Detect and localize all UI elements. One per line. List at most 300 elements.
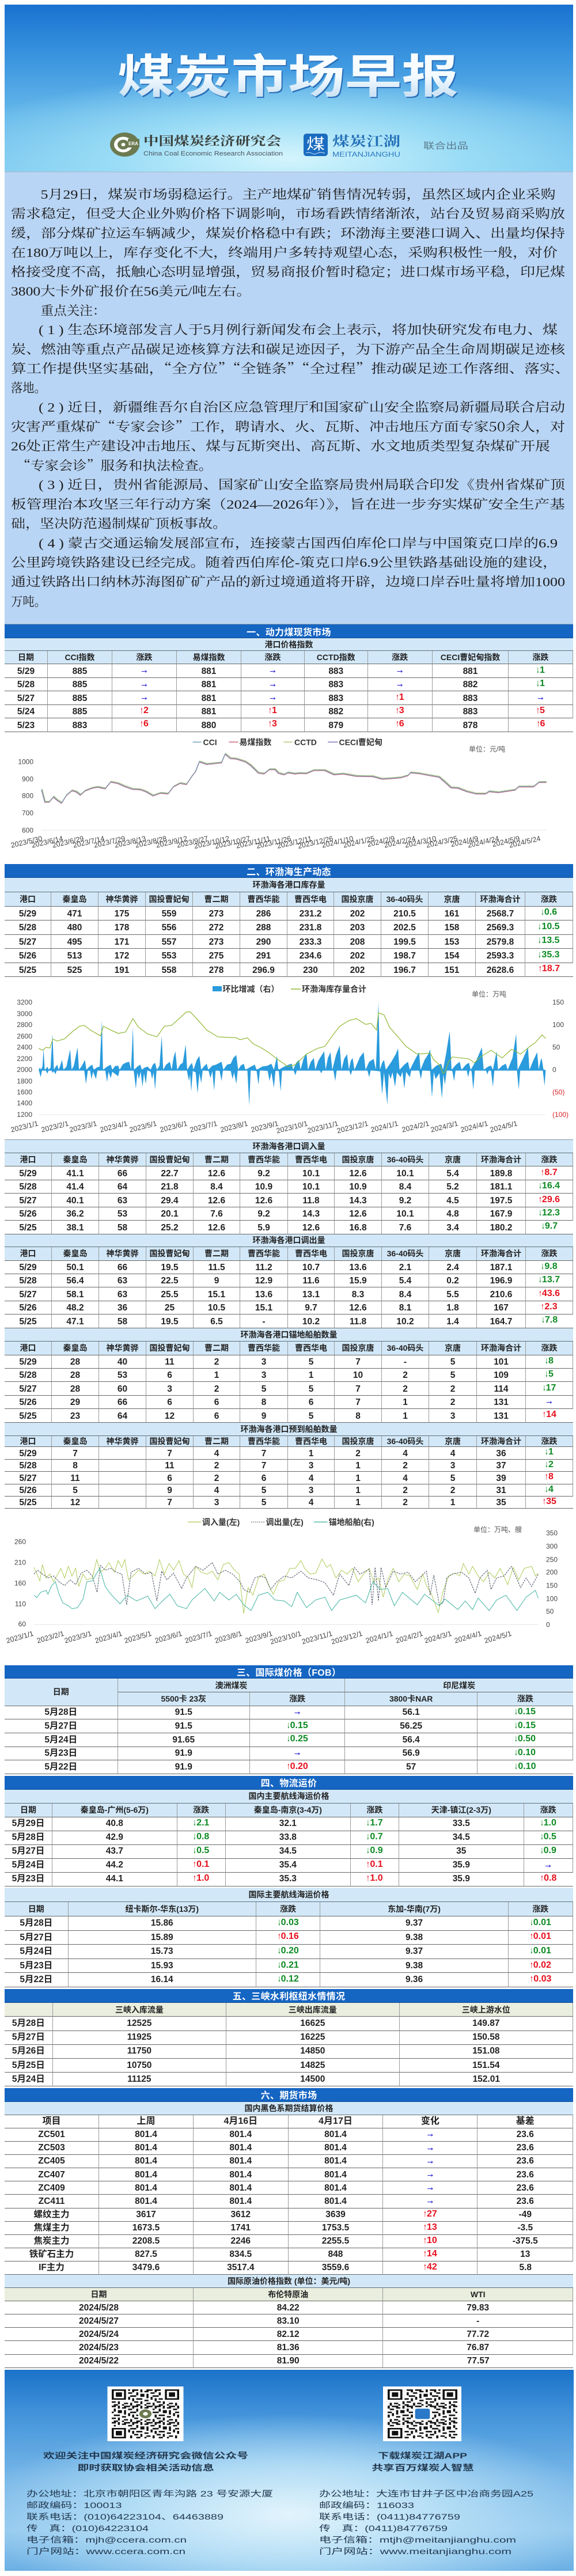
- table: FOB prices: 0.50: [518, 1734, 536, 1744]
- contact details: Dalian: 电子信箱：mtjh@meitanjianghu.com: [319, 2535, 516, 2544]
- table: port inflow: 41.1: [66, 1169, 84, 1179]
- table: port price index: ↑: [269, 719, 271, 729]
- table: ferrous futures settlement: 上周: [137, 2116, 156, 2126]
- legend: CECI曹妃甸: [339, 737, 382, 747]
- left y axis: 2400: [17, 1043, 32, 1051]
- table: anchored vessels: 101: [494, 1357, 509, 1367]
- x axis date labels: 2023/11/1: [306, 1119, 339, 1135]
- table: ferrous futures settlement: 23.6: [517, 2196, 534, 2206]
- table: expected vessels: 5/26: [19, 1486, 37, 1495]
- table: port outflow: 9: [214, 1276, 219, 1286]
- table: port inflow: ↑: [539, 1195, 541, 1204]
- table: ferrous futures settlement: ZC409: [38, 2183, 65, 2193]
- table: FOB prices: 56.25: [400, 1721, 422, 1731]
- item 2: [11, 400, 565, 474]
- table: domestic freight: ↑: [367, 1873, 370, 1883]
- legend: 调出量(左): [266, 1518, 304, 1527]
- table: port inventory: 36-40码头: [386, 895, 423, 904]
- table: port inflow: 3.4: [446, 1223, 459, 1233]
- table: port outflow: 36-40码头: [387, 1249, 423, 1258]
- table: port inflow: 53: [118, 1209, 127, 1219]
- table: port inventory: 158: [445, 923, 459, 933]
- table: port outflow: 10.7: [302, 1263, 320, 1272]
- table: port inflow: 9.2: [257, 1169, 270, 1179]
- table: ferrous futures settlement: 2255.5: [322, 2236, 349, 2246]
- x axis date labels: 2024/3/1: [430, 1119, 459, 1134]
- x axis date labels: 2024/5/9: [491, 834, 521, 848]
- item 4: 万吨。: [11, 594, 46, 609]
- table: ferrous futures settlement: [5, 2115, 573, 2275]
- table: port price index: 日期: [18, 653, 34, 662]
- x axis date labels: 2024/4/1: [453, 1630, 483, 1645]
- x axis date labels: 2023/6/14: [31, 834, 64, 849]
- table: expected vessels: [5, 1435, 573, 1509]
- table: port price index: ↓: [537, 665, 539, 675]
- table: port inflow: 秦皇岛: [63, 1155, 88, 1164]
- table: port price index: 878: [463, 721, 478, 730]
- summary paragraph: 格接受度不高，抵触心态明显增强，贸易商报价暂时稳定；进口煤市场平稳，印尼煤: [11, 265, 565, 280]
- table: expected vessels: 4: [309, 1498, 313, 1507]
- table: port price index: →: [536, 692, 545, 702]
- table: port inflow: 港口: [20, 1155, 36, 1164]
- table: ferrous futures settlement: 2208.5: [132, 2236, 160, 2246]
- table: Three Gorges flows: 151.08: [472, 2046, 499, 2056]
- table: ferrous futures settlement: 801.4: [324, 2130, 347, 2139]
- table: domestic freight: 1.0: [196, 1873, 209, 1883]
- line: total inventory: [39, 1012, 545, 1073]
- table: ferrous futures settlement: →: [426, 2129, 434, 2139]
- section heading: [5, 1989, 573, 2003]
- left y axis: 3200: [17, 998, 32, 1006]
- table: crude oil prices: 83.10: [277, 2316, 300, 2326]
- table: Three Gorges flows: 5月26日: [12, 2046, 45, 2056]
- table: ferrous futures settlement: 42: [427, 2262, 437, 2272]
- table: ferrous futures settlement: ↑: [424, 2262, 426, 2272]
- x axis date labels: 2023/7/29: [93, 834, 126, 849]
- table: international freight: ↓: [278, 1946, 281, 1956]
- table: port inflow: 9.2: [399, 1196, 411, 1206]
- table: port inventory: 203: [350, 923, 365, 933]
- table: anchored vessels: 曹西华电: [295, 1343, 327, 1353]
- table: port inflow: 66: [118, 1169, 127, 1179]
- table: expected vessels: 5: [73, 1486, 78, 1495]
- table: port inflow: 38.1: [66, 1223, 84, 1233]
- table: domestic freight: 0.9: [544, 1846, 556, 1855]
- table: ferrous futures settlement: 4月16日: [223, 2116, 257, 2126]
- table: port inflow: 8.4: [399, 1182, 411, 1192]
- table: port inflow: 5.9: [257, 1223, 270, 1233]
- table: domestic freight: 33.8: [279, 1832, 297, 1842]
- table: port outflow: [5, 1247, 573, 1328]
- table: port inflow: 曹西华电: [295, 1155, 327, 1164]
- table: domestic freight: 0.9: [370, 1846, 383, 1855]
- table: port price index: ↑: [537, 706, 539, 715]
- caption: app: 共享百万煤炭人智慧: [372, 2463, 473, 2472]
- table: international freight: 15.89: [151, 1933, 173, 1942]
- section heading: 六、期货市场: [261, 2091, 317, 2101]
- table: anchored vessels: 60: [118, 1384, 127, 1394]
- sub heading: domestic routes: [5, 1790, 573, 1804]
- table: anchored vessels: 6: [167, 1397, 172, 1407]
- x axis date labels: 2023/11/11: [235, 834, 271, 850]
- section heading: 二、环渤海生产动态: [247, 867, 331, 877]
- table: FOB prices: 5月24日: [44, 1735, 77, 1745]
- table: ferrous futures settlement: 3559.6: [322, 2263, 349, 2272]
- table: international freight: 5月22日: [20, 1975, 52, 1984]
- table: ferrous futures settlement: 项目: [42, 2116, 61, 2126]
- legend: CCI: [203, 737, 217, 747]
- table: anchored vessels: 国投曹妃甸: [150, 1343, 190, 1353]
- table: domestic freight: ↓: [540, 1832, 543, 1842]
- contact details: Beijing: 电子信箱：mjh@ccera.com.cn: [26, 2535, 187, 2544]
- table: anchored vessels: 曹二期: [204, 1343, 229, 1353]
- table: ferrous futures settlement: ZC411: [39, 2196, 65, 2206]
- table: domestic freight: 1.7: [370, 1818, 383, 1828]
- table: international freight: 0.16: [281, 1931, 299, 1941]
- table: expected vessels: 6: [262, 1473, 266, 1483]
- table: ferrous futures settlement: 801.4: [324, 2156, 347, 2166]
- table: domestic freight: ↓: [194, 1846, 196, 1855]
- table: anchored vessels: 3: [262, 1357, 266, 1367]
- table: expected vessels: 8: [548, 1472, 554, 1482]
- table: port inventory: 2569.3: [487, 923, 514, 933]
- table: domestic freight: 天津-镇江(2-3万): [431, 1805, 491, 1814]
- sub heading: anchored vessels: 环渤海各港口锚地船舶数量: [241, 1330, 338, 1339]
- table: port price index: →: [268, 665, 277, 675]
- table: port inventory: 230: [303, 965, 318, 975]
- table: domestic freight: 5月23日: [12, 1874, 44, 1884]
- table: port inventory: 480: [67, 923, 82, 933]
- table: expected vessels: 5/25: [19, 1498, 37, 1507]
- table: FOB prices: ↓: [515, 1748, 517, 1757]
- table: ferrous futures settlement: 848: [328, 2249, 343, 2259]
- table: port outflow: 8.4: [399, 1290, 411, 1300]
- table: ferrous futures settlement: 801.4: [324, 2143, 347, 2153]
- table: ferrous futures settlement: 801.4: [135, 2183, 157, 2193]
- table: FOB prices: ↓: [515, 1734, 517, 1744]
- x axis date labels: 2024/1/1: [365, 1630, 394, 1645]
- table: anchored vessels: 1: [214, 1370, 219, 1380]
- table: port inflow: 4.5: [446, 1196, 459, 1206]
- table: port inventory: 国投京唐: [341, 895, 373, 904]
- table: ferrous futures settlement: 焦炭主力: [33, 2236, 69, 2246]
- table: expected vessels: 曹二期: [204, 1437, 229, 1446]
- item 3: 板管理治本攻坚三年行动方案（2024—2026年）》，旨在进一步夯实煤矿安全生产基: [11, 497, 565, 512]
- contact details: Beijing: [26, 2489, 273, 2556]
- table: expected vessels: 9: [167, 1486, 172, 1495]
- section 4: logistics freight: [5, 1776, 573, 1987]
- table: ferrous futures settlement: 801.4: [229, 2143, 252, 2153]
- table: port outflow: 58: [118, 1317, 127, 1327]
- x axis date labels: 2024/2/1: [395, 1630, 424, 1645]
- table: port inflow: 58: [118, 1223, 127, 1233]
- table: port outflow: 5/28: [19, 1276, 37, 1286]
- table: port inflow: 29.4: [161, 1196, 179, 1206]
- table: port inventory: 神华黄骅: [106, 895, 138, 904]
- table: international freight: 0.03: [281, 1918, 299, 1927]
- table: port inventory: 0.6: [544, 907, 557, 917]
- table: port price index: ↑: [537, 719, 540, 729]
- table: port price index: 5: [540, 706, 545, 715]
- table: port inventory: [5, 892, 573, 977]
- right y axis: 150: [552, 998, 564, 1006]
- summary paragraph: [11, 187, 565, 298]
- table: expected vessels: 曹西华电: [295, 1437, 327, 1446]
- x axis date labels: 2023/2/1: [40, 1119, 70, 1134]
- table: anchored vessels: 6: [214, 1397, 219, 1407]
- table: domestic freight: 35: [456, 1846, 466, 1856]
- table: FOB prices: 5月28日: [44, 1707, 77, 1717]
- section heading: [5, 1776, 573, 1790]
- left y axis: 110: [15, 1600, 26, 1608]
- sub heading: port outflow: 环渤海各港口调出量: [252, 1236, 325, 1245]
- table: port inflow: 16.8: [349, 1223, 367, 1233]
- table: port outflow: 43.6: [542, 1289, 560, 1298]
- table: expected vessels: 37: [496, 1461, 506, 1471]
- table: port price index: 3: [272, 719, 277, 729]
- table: domestic freight: 2.1: [196, 1818, 209, 1828]
- table: port inventory: ↓: [539, 950, 541, 960]
- table: FOB prices: 印尼煤炭: [443, 1681, 475, 1690]
- table: port outflow: 涨跌: [541, 1249, 558, 1258]
- x axis date labels: 2023/10/27: [214, 834, 251, 850]
- x axis date labels: 2023/12/1: [331, 1630, 363, 1646]
- sub heading: port price index: [5, 638, 573, 651]
- table: port inflow: 22.7: [161, 1169, 179, 1179]
- table: ferrous futures settlement: 螺纹主力: [33, 2210, 69, 2219]
- table: expected vessels: 7: [167, 1449, 172, 1459]
- right y axis: 100: [552, 1021, 564, 1029]
- table: port outflow: 48.2: [66, 1303, 84, 1313]
- x axis date labels: 2023/7/14: [72, 834, 105, 849]
- table: port outflow: 1.4: [446, 1317, 459, 1327]
- table: port outflow: 13.1: [302, 1290, 320, 1300]
- table: anchored vessels: 10: [353, 1370, 363, 1380]
- table: Three Gorges flows: [5, 2003, 573, 2086]
- table: ferrous futures settlement: 13: [520, 2249, 530, 2259]
- table: port inventory: 233.3: [300, 937, 321, 947]
- logo: Meitan Jianghu: 煤: [306, 132, 325, 154]
- table: domestic freight: 35.4: [279, 1860, 297, 1870]
- table: anchored vessels: 6: [214, 1411, 219, 1421]
- table: anchored vessels: 29: [70, 1397, 80, 1407]
- table: ferrous futures settlement: ZC501: [38, 2130, 65, 2139]
- table: ferrous futures settlement: 801.4: [135, 2196, 157, 2206]
- x axis date labels: 2024/2/9: [366, 834, 396, 848]
- caption: WeChat account: 欢迎关注中国煤炭经济研究会微信公众号: [43, 2451, 248, 2460]
- table: expected vessels: 6: [167, 1473, 172, 1483]
- table: port inflow: 189.8: [490, 1169, 512, 1179]
- table: Three Gorges flows: 14825: [300, 2060, 325, 2070]
- table: port outflow: 13.6: [349, 1263, 367, 1272]
- table: international freight: 5月27日: [20, 1933, 52, 1942]
- table: anchored vessels: 5/29: [19, 1357, 37, 1367]
- table: domestic freight: 35.3: [279, 1874, 297, 1884]
- table: ferrous futures settlement: ↑: [424, 2236, 426, 2245]
- x axis date labels: 2023/2/1: [36, 1630, 65, 1645]
- table: port outflow: 1.8: [446, 1303, 459, 1313]
- table: anchored vessels: 2: [450, 1397, 455, 1407]
- item 2: 26处正常生产建设冲击地压、煤与瓦斯突出、高瓦斯、水文地质类型复杂煤矿开展: [11, 439, 550, 453]
- left y axis: 2000: [17, 1066, 32, 1074]
- table: port inflow: 25.2: [161, 1223, 179, 1233]
- table: port inflow: [5, 1153, 573, 1234]
- table: crude oil prices: 81.90: [277, 2356, 300, 2366]
- table: international freight: 0.01: [533, 1918, 551, 1927]
- left y axis: 1400: [17, 1099, 32, 1107]
- table: anchored vessels: 23: [70, 1411, 80, 1421]
- table: ferrous futures settlement: 827.5: [135, 2249, 157, 2259]
- table: port price index: 1: [540, 679, 545, 688]
- table: domestic freight: 42.9: [106, 1832, 123, 1842]
- table: port inflow: 12.6: [349, 1209, 367, 1219]
- table: crude oil prices: 日期: [91, 2290, 107, 2299]
- table: port inflow: 10.1: [396, 1209, 414, 1219]
- section 2: Bohai Rim production dynamics: [5, 864, 573, 1646]
- table: port inventory: 202: [350, 909, 365, 918]
- section 6: futures market: [5, 2088, 573, 2368]
- table: crude oil prices: [5, 2288, 573, 2368]
- legend: 环渤海库存量合计: [302, 984, 366, 994]
- table: ferrous futures settlement: 3612: [231, 2210, 251, 2219]
- summary paragraph: 在180万吨以上，库存变化不大，终端用户多转持观望心态，采购积极性一般，对价: [11, 245, 558, 260]
- table: expected vessels: 11: [70, 1473, 80, 1483]
- table: port inventory: ↓: [541, 907, 544, 917]
- right y axis: 300: [546, 1543, 558, 1551]
- table: crude oil prices: -: [476, 2316, 479, 2326]
- table: port inventory: 171: [115, 937, 129, 947]
- table: port inventory: ↑: [539, 964, 541, 973]
- table: port inflow: 涨跌: [541, 1155, 558, 1164]
- table: expected vessels: 2: [450, 1486, 455, 1495]
- table: port outflow: 15.1: [255, 1303, 272, 1313]
- table: anchored vessels: 5: [262, 1384, 266, 1394]
- table: anchored vessels: 114: [494, 1384, 508, 1394]
- section heading: [5, 2088, 573, 2102]
- table: port inflow: 64: [118, 1182, 127, 1192]
- table: Three Gorges flows: 11125: [127, 2074, 151, 2084]
- table: expected vessels: 2: [403, 1498, 408, 1507]
- table: port outflow: 10.2: [302, 1317, 320, 1327]
- table: ferrous futures settlement: 1673.5: [132, 2223, 160, 2233]
- caption: WeChat account: 即时获取协会相关活动信息: [78, 2463, 214, 2472]
- table: anchored vessels: 14: [546, 1410, 556, 1419]
- table: port outflow: 曹二期: [204, 1249, 229, 1258]
- table: domestic freight: [5, 1804, 573, 1886]
- table: port inflow: 14.3: [349, 1196, 367, 1206]
- table: anchored vessels: [5, 1342, 573, 1423]
- right y axis: 50: [546, 1608, 554, 1616]
- table: domestic freight: 秦皇岛-南京(3-4万): [254, 1805, 322, 1814]
- table: port inventory: 5/27: [19, 937, 36, 947]
- table: port outflow: 63: [118, 1276, 127, 1286]
- table: port inflow: 神华黄骅: [106, 1155, 138, 1164]
- table: port outflow: ↓: [541, 1262, 544, 1271]
- table: port price index: 885: [73, 694, 87, 703]
- legend: [188, 1518, 374, 1527]
- x axis date labels: 2023/6/1: [154, 1630, 183, 1645]
- table: ferrous futures settlement: →: [426, 2143, 434, 2152]
- table: FOB prices: 5月27日: [44, 1721, 77, 1731]
- right y axis: 0: [552, 1066, 556, 1074]
- item 1: ( 1 ) 生态环境部发言人于5月例行新闻发布会上表示，将加快研究发布电力、煤: [39, 323, 558, 338]
- table: Three Gorges flows: 150.58: [472, 2032, 499, 2042]
- table: FOB prices: 91.9: [175, 1748, 192, 1758]
- table: port inflow: 10.9: [349, 1182, 367, 1192]
- table: port inventory: 5/26: [19, 951, 36, 961]
- table: domestic freight: 0.7: [370, 1832, 383, 1842]
- QR code: WeChat official account: [107, 2386, 183, 2441]
- table: international freight: 15.93: [151, 1961, 173, 1971]
- table: anchored vessels: 40: [118, 1357, 127, 1367]
- table: expected vessels: 7: [167, 1498, 172, 1507]
- table: port inflow: 20.1: [161, 1209, 179, 1219]
- table: port inventory: 288: [256, 923, 271, 933]
- table: port inventory: 290: [256, 937, 271, 947]
- table: international freight: ↑: [278, 1931, 281, 1941]
- table: port outflow: 11.6: [302, 1276, 320, 1286]
- table: expected vessels: 秦皇岛: [63, 1437, 88, 1446]
- x axis date labels: 2024/2/24: [383, 834, 416, 849]
- table: international freight: 9.37: [406, 1946, 423, 1956]
- table: domestic freight: 0.8: [196, 1832, 209, 1842]
- table: anchored vessels: 28: [70, 1357, 80, 1367]
- table: anchored vessels: 2: [403, 1384, 408, 1394]
- table: port price index: 885: [73, 680, 87, 690]
- table: ferrous futures settlement: IF主力: [39, 2263, 65, 2272]
- sub heading: expected vessels: 环渤海各港口预到船舶数量: [241, 1424, 338, 1433]
- table: port price index: 5/27: [17, 694, 35, 703]
- sub heading: ferrous futures: 国内黑色系期货结算价格: [244, 2104, 333, 2113]
- table: Three Gorges flows: 16625: [300, 2018, 325, 2028]
- table: domestic freight: 5月28日: [12, 1832, 44, 1842]
- table: port outflow: 国投京唐: [342, 1249, 374, 1258]
- item 3: [11, 478, 566, 532]
- right y axis: 350: [546, 1529, 558, 1537]
- bars: week-on-week change: [39, 1002, 545, 1105]
- table: anchored vessels: 5/27: [19, 1384, 37, 1394]
- table: FOB prices: 91.5: [175, 1721, 192, 1731]
- table: international freight: 0.03: [533, 1974, 551, 1984]
- table: FOB prices: 0.15: [518, 1721, 536, 1730]
- table: port price index: ↑: [396, 692, 399, 702]
- table: port price index: 880: [202, 721, 216, 730]
- y axis labels: [18, 757, 33, 834]
- table: port inflow: 7.6: [399, 1223, 411, 1233]
- table: port outflow: 国投曹妃甸: [150, 1249, 190, 1258]
- table: domestic freight: 0.1: [370, 1859, 383, 1869]
- table: crude oil prices: 2024/5/24: [79, 2329, 119, 2339]
- section heading: [5, 1665, 573, 1679]
- table: ferrous futures settlement: 801.4: [135, 2169, 157, 2180]
- table: anchored vessels: 28: [70, 1384, 80, 1394]
- table: port price index: ↑: [141, 706, 143, 715]
- section 5: Three Gorges water conditions: [5, 1989, 573, 2086]
- table: anchored vessels: 3: [450, 1411, 455, 1421]
- contact details: Beijing: 传 真：(010)64223104: [26, 2524, 149, 2533]
- x axis date labels: 2023/12/1: [336, 1119, 369, 1135]
- logo: China Coal Economic Research Association: China Coal Economic Research Association: [143, 150, 283, 157]
- table: port inventory: 京唐: [444, 895, 460, 904]
- table: port inventory: 296.9: [252, 965, 275, 975]
- table: port outflow: 25.5: [161, 1290, 179, 1300]
- table: domestic freight: 32.1: [279, 1819, 297, 1828]
- table: port price index: CCI指数: [65, 653, 95, 662]
- x axis date labels: 2023/8/1: [219, 1119, 249, 1134]
- table: domestic freight: ↑: [541, 1873, 543, 1883]
- table: crude oil prices: 2024/5/22: [79, 2356, 119, 2366]
- table: port price index: 881: [202, 680, 216, 690]
